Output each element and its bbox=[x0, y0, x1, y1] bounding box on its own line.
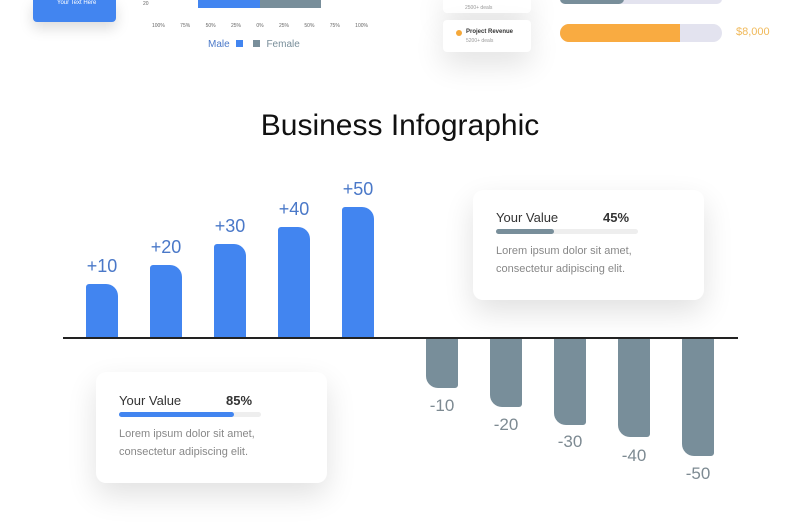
progress bars bbox=[560, 0, 722, 4]
chart: positive/negative bars: +20 bbox=[151, 237, 181, 257]
title: Business Infographic bbox=[261, 109, 539, 142]
project cards: 2500+ deals bbox=[465, 5, 492, 11]
legend: Male Female bbox=[208, 39, 300, 50]
top strip: previous slide fragment: Project Revenue bbox=[466, 29, 513, 35]
card: 85%: 85% bbox=[226, 393, 252, 408]
blue tag box: Your Text Here bbox=[57, 0, 96, 6]
chart: positive/negative bars: -40 bbox=[622, 446, 646, 465]
card: 45% bbox=[473, 190, 704, 300]
population chart fragment: 100% 75% 50% 25% 0% 25% 50% 75% 100% bbox=[152, 23, 368, 29]
population chart fragment: 20 bbox=[143, 1, 149, 7]
chart: positive/negative bars bbox=[63, 179, 738, 483]
top strip: previous slide fragment: $8,000 bbox=[736, 26, 770, 38]
chart: positive/negative bars: -30 bbox=[558, 432, 582, 451]
card: 45%: consectetur adipiscing elit. bbox=[496, 263, 625, 275]
chart: positive/negative bars: -50 bbox=[686, 464, 710, 483]
chart: positive/negative bars: +40 bbox=[279, 199, 309, 219]
card: 45%: Lorem ipsum dolor sit amet, bbox=[496, 245, 632, 257]
chart: positive/negative bars: +50 bbox=[343, 179, 373, 199]
card: 85% bbox=[96, 372, 327, 483]
chart: positive/negative bars: +10 bbox=[87, 256, 117, 276]
card: 85%: consectetur adipiscing elit. bbox=[119, 446, 248, 458]
blue tag box bbox=[33, 0, 116, 22]
chart: positive/negative bars: -20 bbox=[494, 415, 518, 434]
top strip: previous slide fragment: 5200+ deals bbox=[466, 38, 493, 44]
card: 45%: Your Value bbox=[496, 210, 558, 225]
card: 45%: 45% bbox=[603, 210, 629, 225]
chart: positive/negative bars: +30 bbox=[215, 216, 245, 236]
card: 85%: Lorem ipsum dolor sit amet, bbox=[119, 428, 255, 440]
population chart fragment bbox=[143, 0, 368, 50]
top strip: previous slide fragment bbox=[28, 0, 770, 72]
card: 85%: Your Value bbox=[119, 393, 181, 408]
chart: positive/negative bars: -10 bbox=[430, 396, 454, 415]
project cards bbox=[443, 0, 531, 13]
